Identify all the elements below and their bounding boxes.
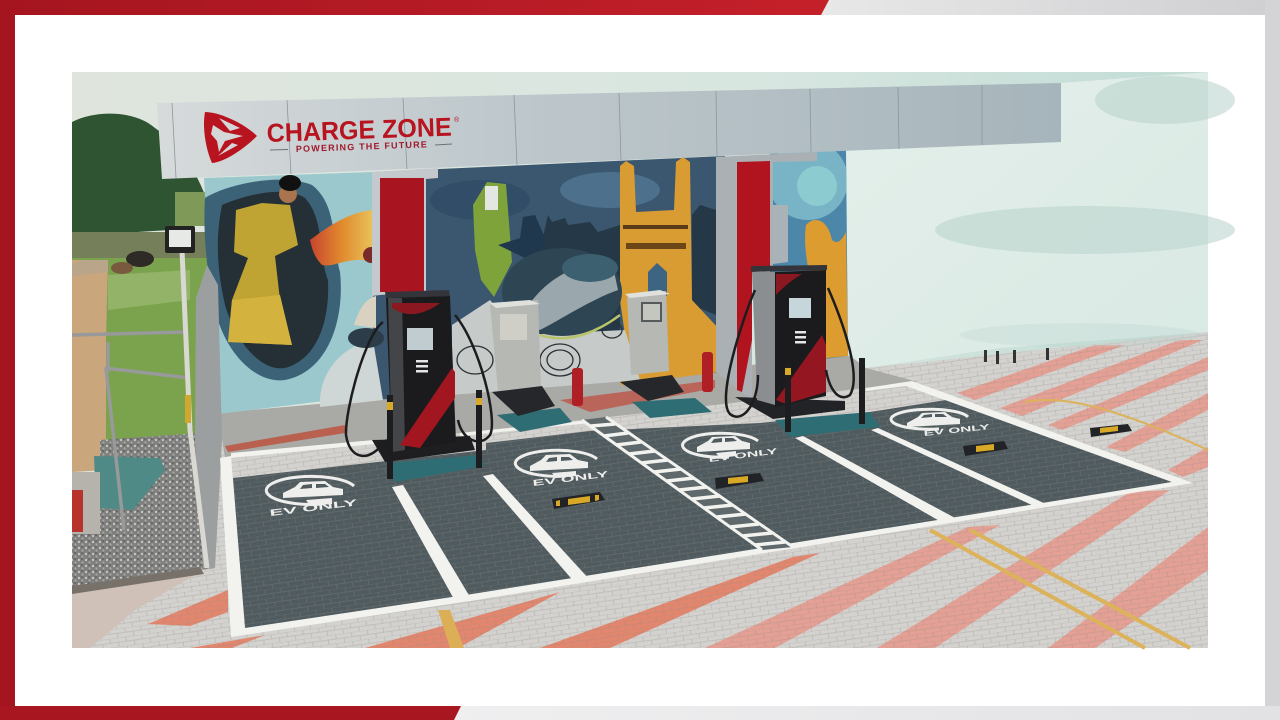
marking bay 4: EV ONLY <box>923 422 990 438</box>
canopy columns <box>372 152 817 400</box>
registered mark: ® <box>454 116 460 124</box>
marking bay 3: EV ONLY <box>708 446 779 464</box>
painted car <box>502 248 622 336</box>
hatched walkway <box>582 417 793 550</box>
teal bench <box>94 456 165 510</box>
doodle background <box>452 300 640 395</box>
canopy with logo <box>157 83 1061 179</box>
logo text: CHARGE ZONE <box>266 112 452 148</box>
right bollards <box>785 362 791 432</box>
marking bay 4 <box>891 409 990 438</box>
right wall masked <box>846 72 1208 368</box>
left bollards <box>387 395 393 479</box>
marking bay 2 <box>515 450 609 488</box>
fence posts <box>72 332 190 530</box>
minar monument <box>620 157 720 385</box>
wall haze <box>935 76 1235 347</box>
city skyline <box>540 205 716 340</box>
marking bay 2: EV ONLY <box>532 469 609 488</box>
painted person <box>498 215 546 265</box>
furniture legs behind wall <box>984 348 1049 364</box>
tall fence panel <box>195 265 222 568</box>
wheel stops <box>552 424 1132 509</box>
flowing scarf <box>310 210 373 265</box>
teal charger pads <box>386 398 880 482</box>
charger left <box>346 290 492 479</box>
dancer figure <box>228 203 298 345</box>
paver texture <box>72 332 1208 648</box>
left utility box and gravel <box>72 226 222 594</box>
sky and background <box>72 72 1208 648</box>
bottom left bare ground <box>72 572 200 648</box>
EV only markings <box>266 409 990 518</box>
flood lamp <box>165 226 195 253</box>
right charger cables <box>726 288 854 417</box>
fire extinguishers <box>572 352 713 406</box>
pale arc shape <box>320 340 383 407</box>
marking bay 1: EV ONLY <box>269 497 358 518</box>
power cabinets <box>490 290 684 416</box>
mural wall <box>204 140 848 414</box>
bay boundary lines <box>220 381 1193 637</box>
photo: EV charging station <box>72 72 1235 648</box>
left charger cables <box>346 315 492 456</box>
logo tagline: POWERING THE FUTURE <box>296 139 427 154</box>
shaded paving beside mural <box>218 356 918 458</box>
marking bay 3 <box>682 433 779 464</box>
dancer outer blob <box>204 180 341 380</box>
paver saturated stripes <box>148 553 820 648</box>
yellow road markings <box>930 400 1208 648</box>
trees and field <box>72 114 218 448</box>
charger right <box>726 265 865 432</box>
paver red stripes <box>705 340 1208 648</box>
logo mark <box>204 112 257 163</box>
right mural shapes <box>773 151 848 358</box>
ground: paved forecourt <box>72 332 1208 648</box>
doodle swirls <box>457 315 622 376</box>
green kiosk painting <box>473 182 512 297</box>
parking bays <box>220 381 1193 637</box>
marking bay 1 <box>266 476 358 518</box>
yellow pole <box>182 250 207 568</box>
